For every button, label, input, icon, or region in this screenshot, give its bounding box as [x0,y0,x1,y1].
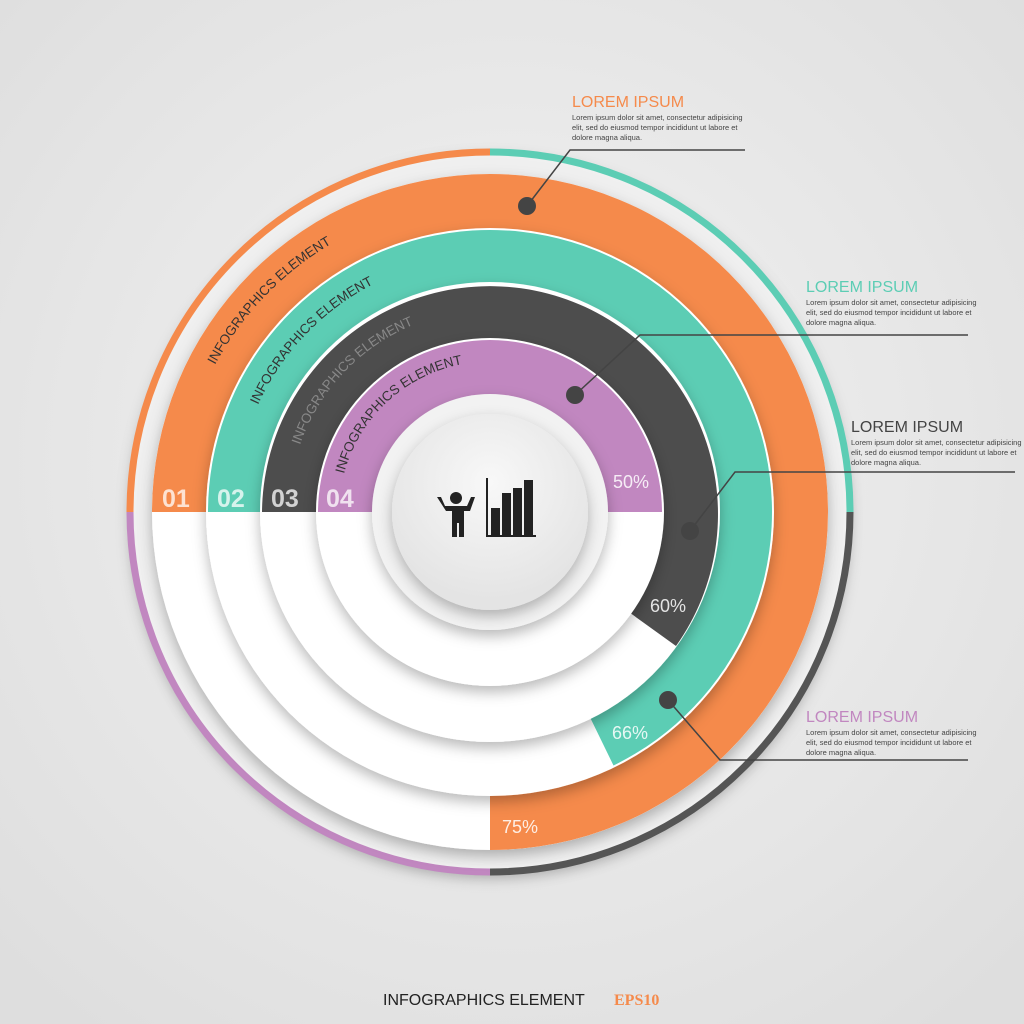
percentages [502,472,686,837]
ring 01 orange 75% [152,174,828,850]
callout 1: LOREM IPSUM [572,94,684,111]
callout 2: elit, sed do eiusmod tempor incididunt ut labore et [806,308,972,317]
callout 2: Lorem ipsum dolor sit amet, consectetur adipisicing [806,298,976,307]
callout 2: LOREM IPSUM [806,279,918,296]
callout 1: elit, sed do eiusmod tempor incididunt ut labore et [572,123,738,132]
callout 4: dolore magna aliqua. [806,748,876,757]
ring labels curved: INFOGRAPHICS ELEMENT [250,276,370,404]
callout 1: dolore magna aliqua. [572,133,642,142]
percentages: 50% [613,472,649,492]
inner disk [372,394,608,630]
ring numbers [162,485,354,513]
ring numbers: 03 [271,485,299,513]
callout 4 [659,691,976,760]
callout 1 [518,94,745,215]
ring labels curved: INFOGRAPHICS ELEMENT [208,236,328,364]
icon: person [437,492,475,537]
ring labels curved [208,236,460,473]
callout 4: Lorem ipsum dolor sit amet, consectetur adipisicing [806,728,976,737]
icon: bar chart [486,478,536,537]
callout 2 [566,279,976,404]
ring 02 teal 66% [206,228,774,796]
ring labels curved: INFOGRAPHICS ELEMENT [292,316,410,444]
ring 04 purple 50% [316,338,664,686]
callout 3: elit, sed do eiusmod tempor incididunt ut labore et [851,448,1017,457]
ring labels curved: INFOGRAPHICS ELEMENT [335,355,460,473]
callout 4: elit, sed do eiusmod tempor incididunt ut labore et [806,738,972,747]
ring 03 dark 60% [260,282,720,742]
callout 2: dolore magna aliqua. [806,318,876,327]
footer title: EPS10 [614,992,659,1009]
callout 1: Lorem ipsum dolor sit amet, consectetur adipisicing [572,113,742,122]
callout 3: Lorem ipsum dolor sit amet, consectetur adipisicing [851,438,1022,447]
footer title: INFOGRAPHICS ELEMENT [383,992,585,1009]
callout 3 [681,419,1022,540]
callout 3: LOREM IPSUM [851,419,963,436]
ring numbers: 01 [162,485,190,513]
percentages: 75% [502,817,538,837]
ring numbers: 02 [217,485,245,513]
outer ring [130,152,850,872]
percentages: 60% [650,596,686,616]
percentages: 66% [612,723,648,743]
callout 3: dolore magna aliqua. [851,458,921,467]
ring numbers: 04 [326,485,354,513]
callout 4: LOREM IPSUM [806,709,918,726]
